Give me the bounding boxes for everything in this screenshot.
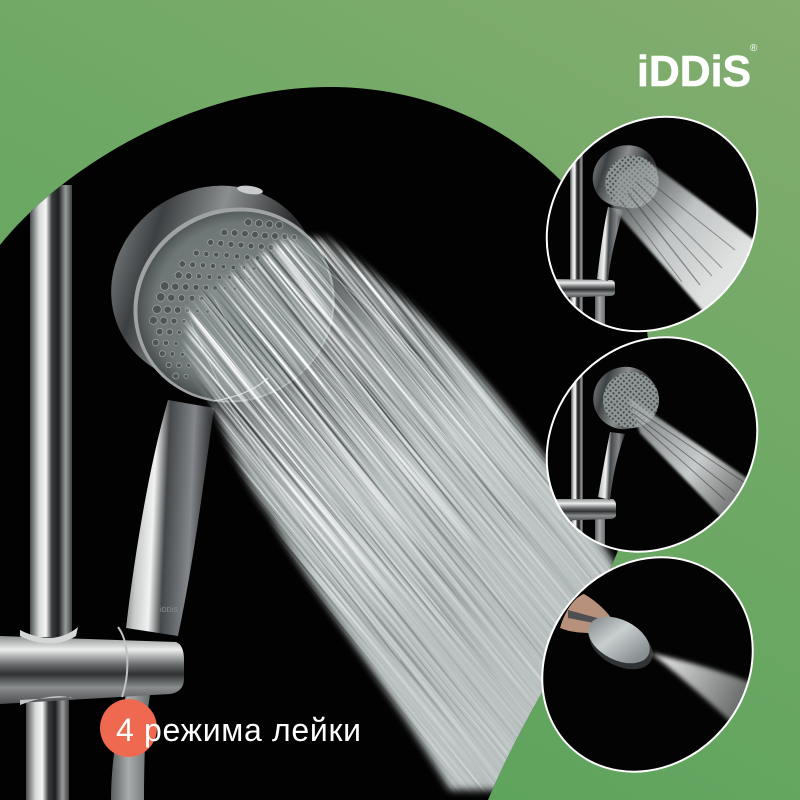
caption: 4 shower modes [100,699,361,757]
handle brand mark: iDDiS [160,607,178,614]
white outline mode 3 [499,514,796,800]
panel: mode 2 concentrated spray [546,336,758,553]
shower handle [126,400,214,636]
logo: IDDIS [637,43,758,96]
mode 1 photo [556,118,756,330]
bracket [552,499,616,521]
mist spray [650,650,748,722]
photo backdrop [562,118,756,330]
photo backdrop [543,558,752,771]
shower head face [138,212,332,400]
black photo backdrop [0,87,648,800]
spray [628,397,746,516]
chrome vertical pole [26,185,72,800]
shower head chrome rim [111,186,334,402]
caption text: 4 режима лейки [116,712,361,748]
spray [610,162,753,311]
bright water jets [190,240,560,660]
shower head seen from the side [588,616,653,670]
handle [597,207,623,281]
shower head [593,366,659,430]
hose [595,519,605,545]
panel: mode 3 mist spray with hand [541,556,754,773]
logo wordmark: iDDiS [637,47,751,96]
spray streak texture [284,300,313,328]
pole [571,375,583,540]
pole [570,154,583,312]
far spray haze [280,346,614,794]
mode 3 photo [543,558,752,771]
slide bracket [0,627,184,705]
nozzle dots [149,219,297,379]
bracket [552,279,615,298]
main water spray [182,232,616,796]
panel: mode 1 wide rain spray [546,116,758,332]
panel: main black photo with shower head [0,87,648,800]
handle [598,432,625,500]
face rim glint [213,378,268,401]
hand [560,594,614,633]
coral badge [100,699,157,757]
shower head [592,145,659,208]
hose [595,296,605,324]
white outline mode 1 [503,74,800,374]
registered mark: ® [750,43,758,54]
flexible hose [111,695,150,800]
white outline mode 2 [503,294,800,595]
photo backdrop [548,338,756,551]
mode 2 photo [548,338,756,551]
